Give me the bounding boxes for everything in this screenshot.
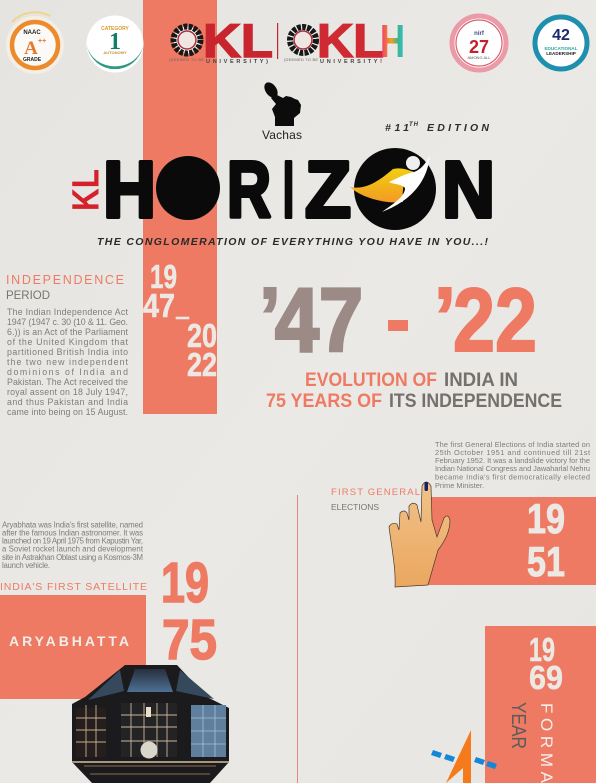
- paragraph: [7, 307, 129, 417]
- years 1969: 69: [529, 659, 563, 696]
- paragraph: Prime Minister.: [435, 481, 484, 490]
- years 1947-2022: 20: [187, 317, 217, 354]
- years 1969: 19: [529, 631, 555, 668]
- paragraph: became India's first democratically elected: [435, 472, 590, 482]
- HORIZON wordmark: O: [365, 149, 425, 227]
- icon: inked voting hand: [389, 482, 450, 587]
- orange panel: [485, 626, 596, 783]
- edition label: TH: [409, 122, 419, 128]
- years 1947-2022: 19: [150, 258, 177, 295]
- badge: Category 1: [86, 16, 144, 72]
- badge: 42 Educational Leadership: 42: [552, 27, 570, 44]
- paragraph: [2, 520, 144, 570]
- paragraph: 25th October 1951 and continued till 21st: [435, 448, 590, 457]
- years 1951: 51: [527, 538, 565, 585]
- badge: NIRF 27: [452, 16, 506, 70]
- orange panel: [428, 497, 596, 585]
- paragraph: launched on 19 April 1975 from Kapustin Yar,: [2, 536, 143, 546]
- headline: '47 - '22: [258, 270, 537, 371]
- paragraph: site in Astrakhan Oblast using a Kosmos-3M: [2, 553, 143, 562]
- subtitle: [266, 370, 562, 412]
- logo: KL University: UNIVERSITY): [206, 59, 268, 65]
- icon: Vachas fist and microphone: [262, 80, 301, 126]
- years 1947-2022: 22: [187, 346, 217, 383]
- section: independence period: [6, 258, 217, 417]
- paragraph: and thus Pakistan and India: [7, 397, 128, 407]
- years 1947-2022: [143, 258, 217, 383]
- heading: INDIA'S FIRST SATELLITE: [0, 581, 147, 593]
- Vachas label: Vachas: [262, 128, 302, 142]
- years 1975: 19: [161, 551, 209, 615]
- HORIZON wordmark: H: [103, 145, 156, 234]
- edition label: EDITION: [427, 122, 489, 134]
- KL rotated mark: KL: [66, 169, 108, 211]
- logo: KLH University: (DEEMED TO BE: [284, 57, 318, 62]
- headline: '47 - '22: ’: [258, 270, 282, 366]
- paragraph: Indian National Congress and Jawaharlal Nehru: [435, 464, 590, 473]
- years 1951: 19: [527, 495, 565, 542]
- paragraph: partitioned British India into: [7, 347, 128, 357]
- rotated heading: FORMA: [537, 703, 556, 783]
- paragraph: launch vehicle.: [2, 561, 50, 570]
- paragraph: a Soviet rocket launch and development: [2, 544, 144, 554]
- subtitle: ITS INDEPENDENCE: [389, 391, 562, 412]
- rotated subheading: YEAR: [507, 702, 529, 749]
- paragraph: The Indian Independence Act: [7, 307, 129, 317]
- logo: KLH University: [284, 14, 405, 67]
- title: KL Horizon logo: [66, 145, 495, 234]
- edition label: [385, 122, 489, 134]
- HORIZON wordmark: I: [283, 145, 294, 234]
- badge: NAAC A++: NAAC: [23, 30, 41, 36]
- HORIZON wordmark: N: [442, 145, 495, 234]
- HORIZON wordmark: O: [166, 158, 210, 225]
- icon: flying figure: [350, 155, 430, 212]
- orange vertical band: [143, 0, 217, 414]
- subheading: ELECTIONS: [331, 502, 379, 512]
- years 1947-2022: 47: [143, 287, 175, 324]
- badge: NIRF 27: 27: [469, 37, 489, 57]
- headline: '47 - '22: 22: [453, 271, 537, 371]
- paragraph: Pakistan. The Act received the: [7, 377, 128, 387]
- paragraph: 1947 (1947 c. 30 (10 & 11. Geo.: [7, 317, 128, 327]
- subtitle: 75 YEARS OF: [266, 391, 382, 412]
- HORIZON wordmark: [103, 145, 495, 234]
- HORIZON wordmark: R: [227, 145, 271, 234]
- paragraph: of the United Kingdom that: [7, 337, 129, 347]
- headline: '47 - '22: 47: [275, 271, 363, 371]
- paragraph: dominions of India and: [7, 367, 128, 377]
- tagline: THE CONGLOMERATION OF EVERYTHING YOU HAVE IN YOU...!: [97, 236, 488, 248]
- subtitle: EVOLUTION OF: [305, 370, 437, 391]
- badge: 42 Educational Leadership: LEADERSHIP: [546, 51, 576, 56]
- badge: 42 Educational Leadership: [535, 17, 587, 69]
- logo: KLH University: KL: [317, 14, 384, 67]
- icon: rocket with blue dashes: [431, 730, 497, 783]
- badge: NIRF 27: nirf: [474, 31, 485, 37]
- HORIZON wordmark: Z: [305, 145, 351, 234]
- headline: '47 - '22: ’: [433, 270, 457, 366]
- section: Aryabhatta: [0, 520, 229, 783]
- paragraph: [435, 440, 590, 490]
- logo: KL University: KL: [203, 14, 273, 67]
- paragraph: came into being on 15 August.: [7, 407, 128, 417]
- section: first general elections: [331, 440, 596, 587]
- vertical divider line: [297, 495, 298, 783]
- badge: NAAC A++: [6, 12, 64, 74]
- badge: Category 1: AUTONOMY: [103, 50, 127, 55]
- logo divider: [277, 23, 278, 59]
- illustration: satellite: [72, 665, 229, 783]
- badge: 42 Educational Leadership: EDUCATIONAL: [544, 46, 578, 51]
- orange panel: [0, 595, 146, 699]
- logo: KL University: [169, 14, 273, 67]
- heading: FIRST GENERAL: [331, 487, 420, 498]
- paragraph: after the famous Indian astronomer. It was: [2, 528, 143, 538]
- badge: NAAC A++: ++: [38, 38, 46, 45]
- badge: NAAC A++: A: [24, 38, 38, 59]
- paragraph: The first General Elections of India started on: [435, 440, 590, 449]
- years 1975: [161, 551, 217, 672]
- subtitle: INDIA IN: [444, 370, 518, 391]
- years 1975: 75: [162, 608, 217, 672]
- paragraph: February 1952. It was a landslide victory for the: [435, 456, 590, 465]
- years 1969: [529, 631, 563, 696]
- paragraph: royal assent on 18 July 1947,: [7, 387, 128, 397]
- label: ARYABHATTA: [9, 633, 129, 649]
- logo: KL University: (DEEMED TO BE: [169, 57, 204, 62]
- paragraph: 6.)) is an Act of the Parliament: [7, 327, 129, 337]
- header logos: [6, 12, 587, 74]
- years 1951: [527, 495, 565, 585]
- heading: INDEPENDENCE: [6, 273, 124, 287]
- logo: KLH University: H: [380, 15, 405, 67]
- badge: Category 1: 1: [109, 29, 121, 55]
- paragraph: the two new independent: [7, 357, 129, 367]
- subheading: PERIOD: [6, 290, 50, 302]
- badge: NIRF 27: AMONG ALL: [467, 55, 491, 60]
- section: formation year: [431, 626, 596, 783]
- logo: KLH University: UNIVERSITY!: [320, 59, 382, 65]
- paragraph: Aryabhata was India's first satellite, named: [2, 520, 143, 530]
- badge: NAAC A++: GRADE: [23, 57, 42, 63]
- edition label: #11: [385, 122, 409, 134]
- badge: Category 1: CATEGORY: [101, 26, 130, 32]
